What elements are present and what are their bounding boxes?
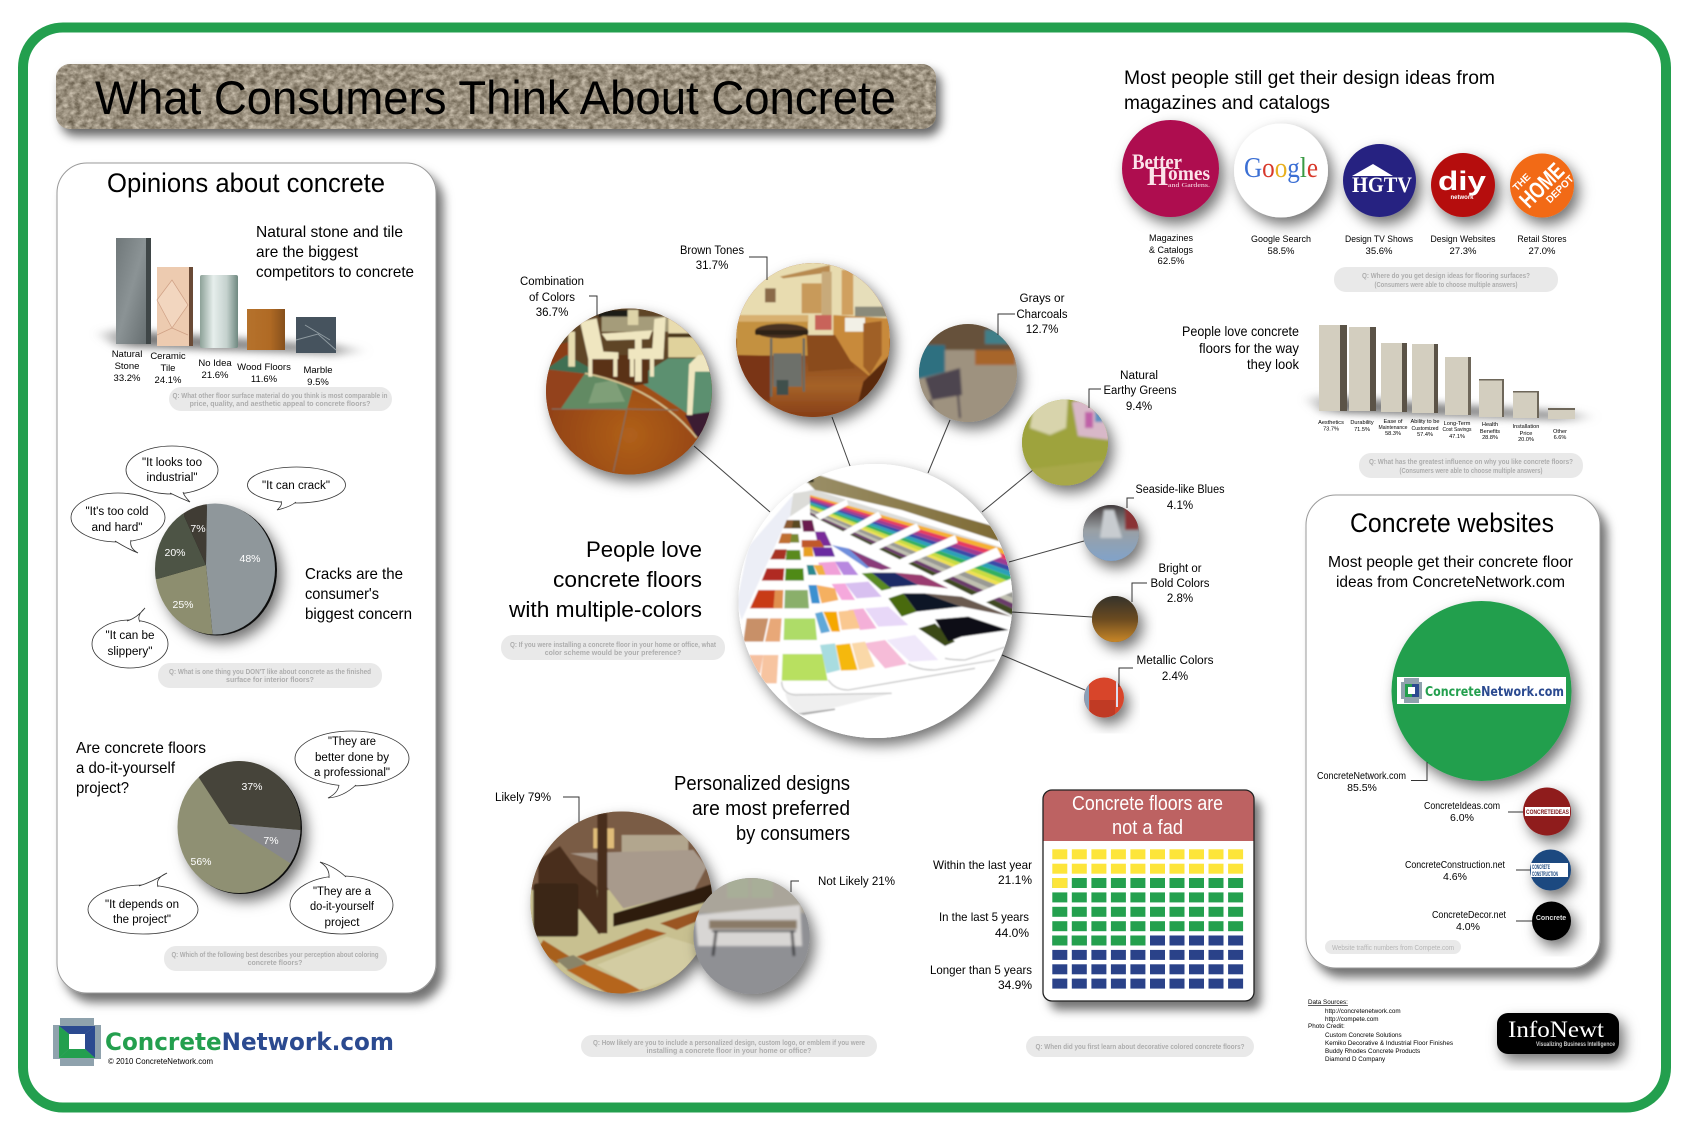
bar labels: Wood Floors bbox=[237, 362, 291, 373]
heading: personalized designs: by consumers bbox=[736, 823, 850, 845]
speech bubble: depends: "It depends on bbox=[105, 899, 179, 911]
bar labels: 9.5% bbox=[307, 377, 329, 388]
bar labels: 21.6% bbox=[202, 370, 229, 381]
label: seaside: Seaside-like Blues bbox=[1136, 484, 1225, 496]
question note: perception bbox=[164, 946, 387, 971]
heading: not a fad: not a fad bbox=[1112, 817, 1183, 839]
reason labels: Health bbox=[1482, 422, 1498, 428]
pie chart: concerns: 48% bbox=[239, 553, 261, 565]
reason labels: Other bbox=[1553, 429, 1567, 435]
icon: Better Homes and Gardens bbox=[1122, 120, 1219, 217]
label: combination of colors: 36.7% bbox=[536, 307, 568, 319]
icon: HGTV: HGTV bbox=[1352, 172, 1412, 197]
photo: paint swatch fan bbox=[735, 460, 1020, 745]
InfoNewt logo bbox=[1497, 1013, 1619, 1054]
reason labels: 73.7% bbox=[1323, 426, 1339, 432]
label: brown tones: 31.7% bbox=[696, 260, 728, 272]
multicolor card bbox=[802, 520, 875, 673]
speech bubble: looks too industrial bbox=[126, 446, 218, 502]
panel: concrete websites bbox=[1306, 495, 1600, 968]
question note: comparable material bbox=[169, 387, 392, 411]
question note: influence: Q: What has the greatest influence on why you like concrete floors? bbox=[1369, 459, 1573, 466]
question note: influence: (Consumers were able to choose multiple answers) bbox=[1400, 468, 1542, 475]
label: ConcreteIdeas: ConcreteIdeas.com bbox=[1424, 800, 1500, 812]
question note: color scheme: Q: If you were installing a concrete floor in your home or office, what bbox=[510, 642, 717, 649]
data sources bbox=[1308, 999, 1453, 1063]
photo: bright colors bbox=[1090, 594, 1140, 644]
bar labels: 11.6% bbox=[251, 374, 278, 385]
label: bright: Bright or bbox=[1158, 563, 1202, 575]
icon: Better Homes and Gardens: omes bbox=[1168, 163, 1210, 185]
label: bright bbox=[1132, 563, 1210, 605]
bar labels: Marble bbox=[303, 365, 333, 376]
waffle labels: 21.1% bbox=[998, 873, 1032, 887]
text: people love multiple colors bbox=[508, 537, 702, 622]
photo: earthy greens bbox=[1020, 395, 1110, 490]
lime card bbox=[782, 520, 828, 681]
speech bubble: looks too industrial: industrial" bbox=[146, 472, 198, 484]
question note: design ideas: Q: Where do you get design ideas for flooring surfaces? bbox=[1362, 273, 1530, 280]
connector lines bbox=[694, 417, 1092, 690]
label: grays bbox=[998, 293, 1068, 336]
bar labels: 33.2% bbox=[114, 373, 141, 384]
pie chart: diy bbox=[170, 750, 310, 900]
speech bubble: do it yourself: project bbox=[324, 917, 360, 929]
icon: The Home Depot: HOME bbox=[1514, 158, 1569, 213]
panel: opinions about concrete bbox=[57, 163, 436, 993]
speech bubble: slippery: "It can be bbox=[106, 630, 154, 642]
speech bubble: too cold and hard bbox=[71, 493, 165, 553]
pie chart: diy: 37% bbox=[241, 781, 263, 793]
icon: Better Homes and Gardens: and Gardens. bbox=[1168, 183, 1211, 189]
text: cracks concern bbox=[305, 566, 412, 623]
photo: brown tones bbox=[732, 258, 895, 425]
text: people love multiple colors: concrete floors bbox=[553, 567, 702, 592]
photo: seaside blues bbox=[1080, 503, 1142, 563]
question note: personalized: Q: How likely are you to include a personalized design, custom logo, or emblem if you were bbox=[593, 1040, 865, 1047]
icon: The Home Depot: THE bbox=[1511, 171, 1533, 194]
label: earthy greens: 9.4% bbox=[1126, 401, 1152, 413]
photo: combination of colors bbox=[542, 305, 718, 478]
question note: influence bbox=[1359, 453, 1583, 478]
speech bubble: depends bbox=[88, 873, 198, 934]
heading: opinions: Opinions about concrete bbox=[107, 168, 385, 198]
question note: perception: concrete floors? bbox=[248, 960, 302, 967]
bubble: ConcreteIdeas: CONCRETEIDEAS bbox=[1526, 810, 1569, 816]
icon: HGTV bbox=[1343, 144, 1416, 217]
question note: design ideas: (Consumers were able to choose multiple answers) bbox=[1374, 282, 1518, 289]
question note: dislike: Q: What is one thing you DON'T like about concrete as the finished bbox=[169, 669, 371, 676]
photo: metallic colors bbox=[1084, 677, 1124, 718]
label: ConcreteDecor: 4.0% bbox=[1456, 921, 1480, 933]
speech bubble: too cold and hard: and hard" bbox=[92, 522, 142, 534]
pie chart: diy: 56% bbox=[190, 856, 212, 868]
heading: design ideas: magazines and catalogs bbox=[1124, 93, 1330, 114]
speech bubble: slippery bbox=[92, 608, 168, 668]
heading: not a fad bbox=[1072, 793, 1223, 839]
source labels: 58.5% bbox=[1268, 246, 1295, 257]
heading: design ideas: Most people still get their design ideas from bbox=[1124, 68, 1495, 89]
bubble: ConcreteIdeas bbox=[1523, 788, 1571, 836]
reason labels: 6.6% bbox=[1554, 435, 1566, 441]
label: ConcreteConstruction: 4.6% bbox=[1443, 871, 1467, 883]
waffle labels: In the last 5 years bbox=[939, 910, 1029, 924]
label: grays: Grays or bbox=[1020, 293, 1065, 305]
label: brown tones: Brown Tones bbox=[680, 245, 744, 257]
bar chart: competitor materials bbox=[92, 238, 372, 355]
reason labels: 28.8% bbox=[1482, 435, 1498, 441]
bubble: ConcreteDecor bbox=[1532, 902, 1571, 940]
bubble: ConcreteConstruction: CONCRETE bbox=[1532, 865, 1550, 871]
label: earthy greens: Natural bbox=[1120, 370, 1158, 382]
text: way they look bbox=[1182, 323, 1300, 372]
speech bubble: looks too industrial: "It looks too bbox=[142, 457, 202, 469]
bar chart: reasons bbox=[1300, 325, 1600, 421]
bar labels: 24.1% bbox=[155, 375, 182, 386]
ConcreteNetwork logo: ConcreteNetwork.com bbox=[105, 1028, 394, 1056]
text: competitors bbox=[256, 224, 414, 281]
icon: Google: Google bbox=[1244, 152, 1318, 184]
source labels: Magazines bbox=[1149, 233, 1193, 244]
waffle chart bbox=[1052, 849, 1243, 989]
photo: grays or charcoals bbox=[915, 320, 1025, 430]
InfoNewt logo: Visualizing Business Intelligence bbox=[1536, 1042, 1616, 1048]
icon: The Home Depot: DEPOT bbox=[1544, 174, 1576, 206]
bubble: ConcreteConstruction: CONSTRUCTION bbox=[1532, 872, 1558, 878]
pie chart: concerns: 25% bbox=[172, 599, 194, 611]
waffle labels: 44.0% bbox=[995, 926, 1029, 940]
bubble: ConcreteConstruction bbox=[1530, 850, 1571, 890]
text: most people bbox=[1328, 554, 1574, 591]
source labels: Google Search bbox=[1251, 234, 1311, 245]
question note: first learn bbox=[1026, 1036, 1254, 1057]
speech bubble: professional: "They are bbox=[328, 736, 376, 748]
waffle labels: Longer than 5 years bbox=[930, 963, 1032, 977]
reason labels: 71.5% bbox=[1354, 427, 1370, 433]
question note: comparable material: price, quality, and aesthetic appeal to concrete floors? bbox=[190, 401, 370, 408]
icon: concrete network bbox=[53, 1018, 101, 1066]
speech bubble: slippery: slippery" bbox=[108, 646, 152, 658]
text: do it yourself question: project? bbox=[76, 780, 129, 797]
InfoNewt logo: InfoNewt bbox=[1508, 1017, 1605, 1042]
source labels: 62.5% bbox=[1158, 256, 1185, 267]
pie chart: concerns bbox=[140, 495, 290, 650]
data sources: Data Sources: bbox=[1308, 999, 1348, 1006]
bar labels bbox=[112, 349, 333, 388]
note: website traffic: Website traffic numbers from Compete.com bbox=[1332, 945, 1454, 952]
speech bubble: can crack: "It can crack" bbox=[262, 480, 330, 492]
label: ConcreteIdeas: 6.0% bbox=[1450, 812, 1474, 824]
reason labels: Ease of bbox=[1384, 419, 1403, 425]
label: ConcreteConstruction: ConcreteConstruction.net bbox=[1405, 859, 1505, 871]
bar labels: Ceramic bbox=[150, 351, 186, 362]
source labels: Design Websites bbox=[1430, 234, 1496, 245]
rainbow card stripes bbox=[810, 495, 1013, 617]
reason labels: Ability to be bbox=[1411, 419, 1439, 425]
data sources: Buddy Rhodes Concrete Products bbox=[1325, 1048, 1420, 1055]
bar labels: Tile bbox=[161, 363, 175, 374]
reason labels: Aesthetics bbox=[1318, 420, 1344, 426]
text: most people: ideas from ConcreteNetwork.com bbox=[1336, 574, 1565, 591]
photo: plain bench bbox=[690, 875, 815, 1000]
label: seaside bbox=[1127, 484, 1225, 512]
text: do it yourself question bbox=[76, 740, 206, 797]
bar labels: Stone bbox=[115, 361, 139, 372]
heading: personalized designs bbox=[674, 773, 850, 845]
source labels bbox=[1149, 233, 1567, 267]
text: cracks concern: Cracks are the bbox=[305, 566, 403, 583]
data sources: http://concretenetwork.com bbox=[1325, 1008, 1401, 1015]
heading: design ideas bbox=[1124, 68, 1495, 114]
label: ConcreteIdeas bbox=[1424, 800, 1523, 824]
data sources: Photo Credit: bbox=[1308, 1023, 1345, 1030]
reason labels: Long-Term bbox=[1444, 421, 1471, 427]
speech bubble: do it yourself: do-it-yourself bbox=[310, 901, 375, 913]
icon: Better Homes and Gardens: H bbox=[1147, 161, 1168, 191]
heading: concrete websites: Concrete websites bbox=[1350, 508, 1554, 538]
text: do it yourself question: Are concrete floors bbox=[76, 740, 206, 757]
data sources: http://compete.com bbox=[1325, 1016, 1379, 1023]
source labels: 27.0% bbox=[1529, 246, 1556, 257]
speech bubble: professional bbox=[295, 731, 409, 798]
text: competitors: are the biggest bbox=[256, 244, 359, 261]
reason labels: Cost Savings bbox=[1442, 427, 1472, 433]
text: cracks concern: biggest concern bbox=[305, 606, 412, 623]
question note: dislike bbox=[158, 663, 382, 688]
reason labels: 58.3% bbox=[1385, 431, 1401, 437]
icon: DIY Network bbox=[1431, 153, 1495, 217]
label: earthy greens: Earthy Greens bbox=[1104, 385, 1177, 397]
label: bright: 2.8% bbox=[1167, 593, 1193, 605]
ConcreteNetwork logo: © 2010 ConcreteNetwork.com bbox=[108, 1057, 213, 1066]
reason labels: Durability bbox=[1350, 420, 1374, 426]
source labels: 27.3% bbox=[1450, 246, 1477, 257]
speech bubble: depends: the project" bbox=[113, 914, 171, 926]
speech bubble: do it yourself bbox=[290, 862, 393, 934]
question note: personalized bbox=[581, 1035, 877, 1057]
label: grays: 12.7% bbox=[1026, 324, 1058, 336]
bubble: ConcreteDecor: Concrete bbox=[1536, 915, 1566, 922]
title banner: What Consumers Think About Concrete bbox=[95, 71, 896, 124]
reason labels: Maintenance bbox=[1378, 425, 1408, 431]
heading: personalized designs: Personalized designs bbox=[674, 773, 850, 795]
source labels: 35.6% bbox=[1366, 246, 1393, 257]
label: metallic: 2.4% bbox=[1162, 671, 1188, 683]
waffle labels: Within the last year bbox=[933, 858, 1032, 872]
speech bubble: can crack bbox=[248, 467, 346, 510]
data sources: Diamond D Company bbox=[1325, 1056, 1386, 1063]
orange card bbox=[743, 520, 793, 683]
panel: not a fad bbox=[1043, 790, 1254, 1001]
question note: personalized: installing a concrete floor in your home or office? bbox=[647, 1048, 811, 1055]
reason labels: 20.0% bbox=[1518, 437, 1534, 443]
icon: Better Homes and Gardens: Better bbox=[1132, 149, 1182, 174]
question note: perception: Q: Which of the following best describes your perception about coloring bbox=[172, 952, 378, 959]
label: metallic: Metallic Colors bbox=[1136, 655, 1214, 667]
bubble: ConcreteNetwork 85.5%: ConcreteNetwork.com bbox=[1425, 685, 1564, 700]
pie chart: concerns: 20% bbox=[164, 547, 186, 559]
question note: comparable material: Q: What other floor surface material do you think is most comparable in bbox=[172, 393, 388, 400]
data sources: Custom Concrete Solutions bbox=[1325, 1032, 1402, 1039]
reason labels: Installation bbox=[1513, 424, 1539, 430]
pie chart: concerns: 7% bbox=[190, 523, 206, 535]
waffle labels bbox=[930, 858, 1032, 992]
label: not likely: Not Likely 21% bbox=[818, 876, 895, 888]
icon: DIY Network: network bbox=[1450, 195, 1474, 201]
bubble: ConcreteNetwork 85.5% bbox=[1392, 601, 1572, 781]
heading: personalized designs: are most preferred bbox=[692, 798, 850, 820]
text: most people: Most people get their concrete floor bbox=[1328, 554, 1574, 571]
reason labels: Price bbox=[1520, 431, 1532, 437]
bar labels: No Idea bbox=[198, 358, 232, 369]
navy cards bbox=[809, 514, 1012, 647]
label: brown tones bbox=[680, 245, 767, 280]
source labels: & Catalogs bbox=[1149, 245, 1193, 256]
speech bubble: do it yourself: "They are a bbox=[313, 886, 372, 898]
text: people love multiple colors: with multiple-colors bbox=[508, 597, 702, 622]
text: way they look: floors for the way bbox=[1199, 340, 1299, 356]
text: do it yourself question: a do-it-yourself bbox=[76, 760, 176, 777]
label: not likely bbox=[791, 876, 895, 892]
reason labels bbox=[1318, 419, 1567, 443]
text: way they look: they look bbox=[1247, 356, 1300, 372]
reason labels: 47.1% bbox=[1449, 434, 1465, 440]
waffle labels: 34.9% bbox=[998, 978, 1032, 992]
label: ConcreteConstruction bbox=[1405, 859, 1530, 883]
label: ConcreteDecor bbox=[1432, 909, 1532, 933]
reason labels: Customized bbox=[1412, 426, 1438, 432]
bar labels: Natural bbox=[112, 349, 142, 360]
text: competitors: Natural stone and tile bbox=[256, 224, 403, 241]
text: cracks concern: consumer's bbox=[305, 586, 379, 603]
reason labels: Benefits bbox=[1480, 429, 1500, 435]
text: people love multiple colors: People love bbox=[586, 537, 702, 562]
question note: dislike: surface for interior floors? bbox=[226, 677, 314, 684]
label: likely bbox=[495, 792, 579, 823]
label: combination of colors bbox=[520, 276, 597, 319]
question note: design ideas bbox=[1334, 267, 1558, 292]
label: earthy greens bbox=[1089, 370, 1177, 413]
label: ConcreteNetwork: 85.5% bbox=[1347, 782, 1377, 794]
pink and lavender cards bbox=[814, 530, 938, 669]
photo: personalized bed bbox=[527, 807, 717, 1000]
source labels: Retail Stores bbox=[1518, 234, 1567, 245]
heading: not a fad: Concrete floors are bbox=[1072, 793, 1223, 815]
reason labels: 57.4% bbox=[1417, 432, 1433, 438]
text: way they look: People love concrete bbox=[1182, 323, 1299, 339]
label: ConcreteNetwork bbox=[1317, 762, 1427, 794]
speech bubble: professional: a professional" bbox=[314, 767, 390, 779]
icon: DIY Network: diy bbox=[1438, 166, 1486, 196]
question note: color scheme bbox=[501, 635, 725, 660]
label: metallic bbox=[1119, 655, 1214, 687]
label: likely: Likely 79% bbox=[495, 792, 551, 804]
text: competitors: competitors to concrete bbox=[256, 264, 414, 281]
label: bright: Bold Colors bbox=[1150, 578, 1210, 590]
label: seaside: 4.1% bbox=[1167, 500, 1193, 512]
label: ConcreteNetwork: ConcreteNetwork.com bbox=[1317, 770, 1406, 782]
label: combination of colors: of Colors bbox=[529, 292, 575, 304]
speech bubble: too cold and hard: "It's too cold bbox=[86, 506, 148, 518]
question note: first learn: Q: When did you first learn about decorative colored concrete floors? bbox=[1036, 1044, 1244, 1051]
question note: color scheme: color scheme would be your preference? bbox=[545, 650, 681, 657]
ConcreteNetwork logo bbox=[53, 1018, 394, 1066]
icon: Google bbox=[1234, 124, 1328, 218]
label: ConcreteDecor: ConcreteDecor.net bbox=[1432, 909, 1506, 921]
source labels: Design TV Shows bbox=[1345, 234, 1413, 245]
speech bubble: professional: better done by bbox=[315, 752, 389, 764]
label: grays: Charcoals bbox=[1016, 309, 1068, 321]
note: website traffic bbox=[1325, 940, 1461, 954]
pie chart: diy: 7% bbox=[263, 835, 279, 847]
data sources: Kemiko Decorative & Industrial Floor Finishes bbox=[1325, 1040, 1453, 1047]
label: combination of colors: Combination bbox=[520, 276, 584, 288]
